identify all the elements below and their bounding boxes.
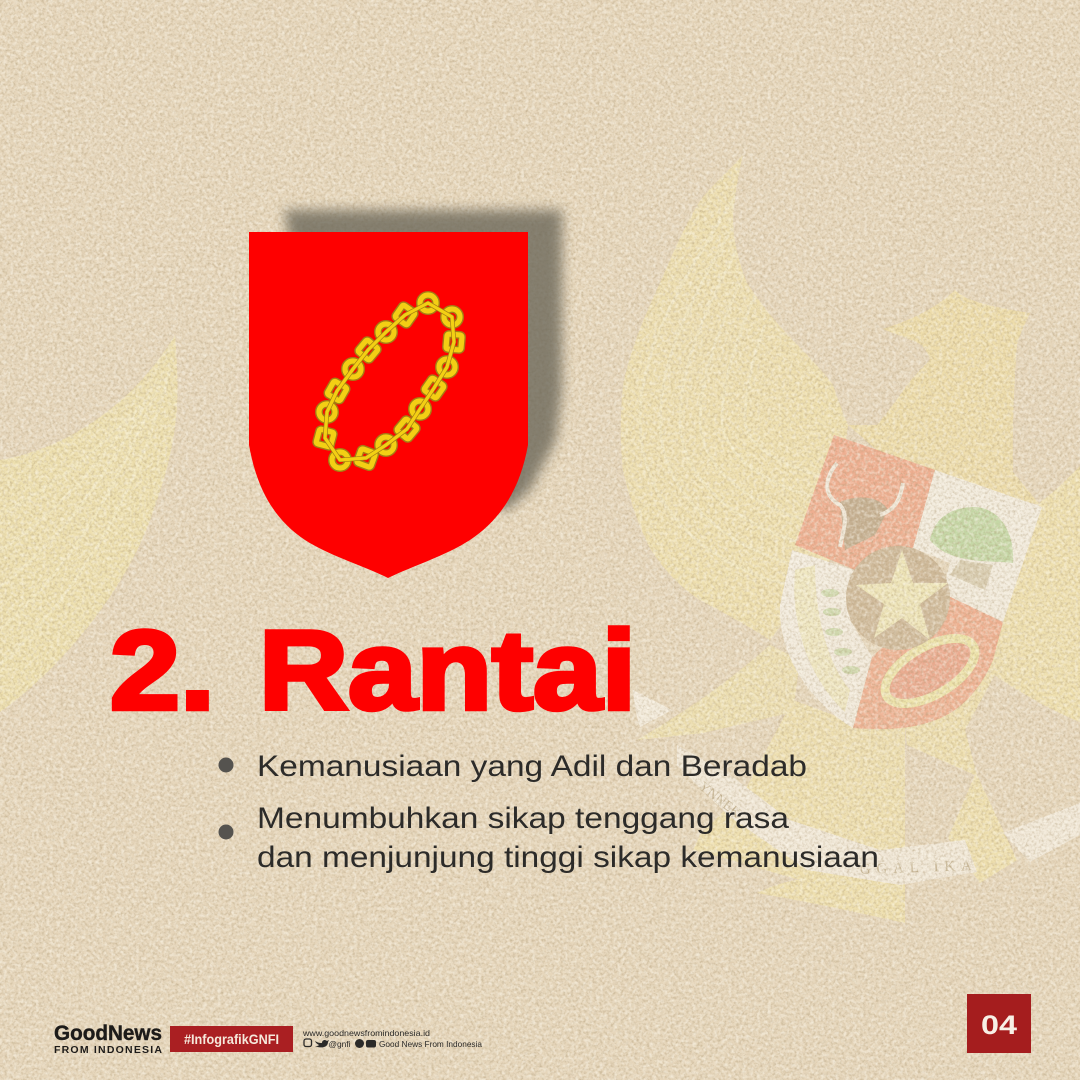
- garuda watermark: [0, 155, 1080, 923]
- emblem: central star circle: [846, 546, 950, 650]
- garuda right leg: [905, 665, 1017, 883]
- emblem: banyan tree: [930, 507, 1013, 590]
- title: 2.: [110, 608, 215, 733]
- ribbon lettering: GGAL IKA: [860, 858, 972, 878]
- shield with chain symbol: [249, 210, 562, 578]
- title: [110, 608, 636, 733]
- website and social handles: www.goodnewsfromindonesia.id: [302, 1028, 430, 1038]
- icon: gold chain: [316, 295, 462, 468]
- emblem: red bottom right quadrant: [853, 593, 1003, 729]
- bullet 2 text: dan menjunjung tinggi sikap kemanusiaan: [257, 841, 879, 874]
- national emblem shield: [780, 435, 1042, 729]
- bullet 1 marker: [218, 758, 234, 772]
- emblem: banteng head: [827, 463, 903, 550]
- emblem: rice and cotton oval: [875, 625, 985, 717]
- garuda right wing fragment: [987, 466, 1080, 722]
- page name: Good News From Indonesia: [379, 1039, 482, 1049]
- garuda motto ribbon: YNNEK: [696, 779, 743, 821]
- page number badge: [967, 994, 1031, 1053]
- icon: youtube: [366, 1040, 376, 1048]
- emblem: white left quadrant: [780, 550, 872, 728]
- hashtag badge: [170, 1026, 293, 1052]
- emblem: rice stalks: [794, 565, 850, 712]
- title: Rantai: [259, 608, 636, 733]
- footer: [54, 1022, 482, 1056]
- emblem: white top right quadrant: [913, 470, 1042, 622]
- garuda head and neck: [848, 290, 1040, 505]
- icon: twitter: [315, 1040, 329, 1047]
- garuda left wing: [0, 335, 177, 712]
- emblem: cotton leaves: [821, 589, 860, 674]
- shield shadow: [284, 210, 562, 512]
- bullet list: [218, 750, 879, 874]
- garuda motto ribbon: [633, 690, 1080, 885]
- bullet 2 text: Menumbuhkan sikap tenggang rasa: [257, 802, 789, 835]
- bullet 2 marker: [218, 824, 234, 840]
- icon: instagram: [304, 1039, 312, 1046]
- emblem: red top left quadrant: [795, 435, 935, 572]
- logo: GoodNews from Indonesia: GoodNews: [54, 1022, 162, 1045]
- garuda right wing: [621, 155, 848, 640]
- handle: @gnfi: [328, 1039, 351, 1049]
- icon: facebook: [355, 1039, 364, 1048]
- logo: GoodNews from Indonesia: [54, 1022, 162, 1056]
- garuda body and tail: [693, 700, 905, 923]
- bullet 2 text: [257, 802, 879, 874]
- website and social handles: [302, 1028, 482, 1049]
- bullet 1 text: Kemanusiaan yang Adil dan Beradab: [257, 750, 807, 783]
- page number badge: 04: [981, 1010, 1017, 1040]
- garuda lower left feather: [637, 645, 800, 740]
- logo: GoodNews from Indonesia: FROM INDONESIA: [54, 1044, 162, 1056]
- red shield: [249, 232, 528, 578]
- hashtag badge: #InfografikGNFI: [184, 1032, 279, 1047]
